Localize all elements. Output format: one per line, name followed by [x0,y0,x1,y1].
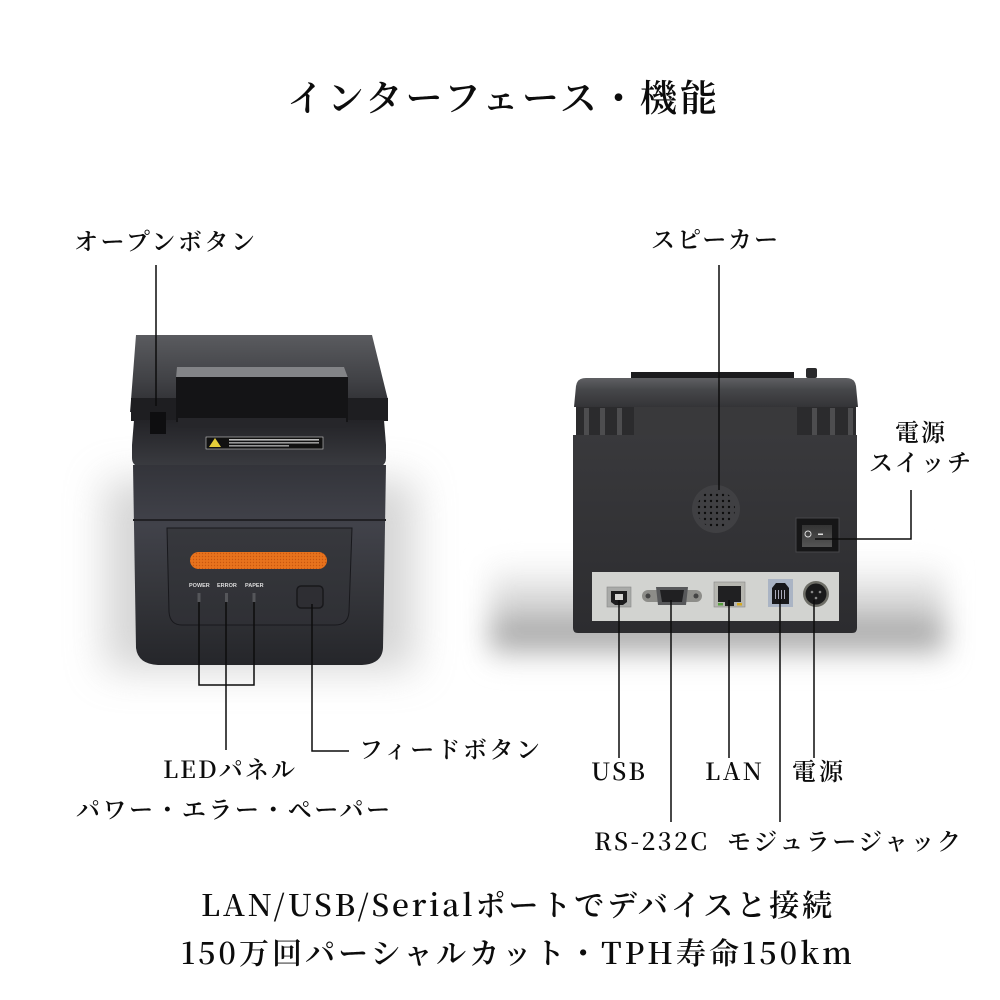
label: open button: オープンボタン [74,222,255,257]
rear body [573,435,857,633]
printer main body [133,465,386,665]
LAN port [714,582,745,607]
warning label [206,437,323,449]
printer rear view [490,368,945,660]
footer line 1: LAN/USB/Serialポートでデバイスと接続 [201,881,832,925]
cover lower band [131,398,388,421]
rear top plate [574,378,858,407]
title: インターフェース・機能 [287,68,717,122]
serial port [642,587,702,605]
printer front view [105,335,415,670]
leader lines [156,265,911,822]
label: LED panel: LEDパネル [163,750,295,785]
paper exit tray [176,367,348,428]
label: modular jack: モジュラージャック [727,822,961,857]
top power key [806,368,817,378]
USB port [607,587,631,607]
front panel [167,528,352,625]
rear printer shadow [490,560,945,660]
label: LED types: パワー・エラー・ペーパー [76,790,390,825]
label: LAN: LAN [705,752,762,787]
LED lights [198,593,256,602]
top bar [631,372,794,378]
footer line 2: 150万回パーシャルカット・TPH寿命150km [181,929,852,973]
LED names: PAPER [245,583,264,589]
power socket [803,581,829,607]
label: feed button: フィードボタン [359,730,540,765]
label: power switch line 1: 電源 [895,413,947,448]
label: RS-232C: RS-232C [594,822,707,857]
label: USB: USB [591,752,645,787]
orange indicator window [190,552,327,569]
rocker switch [796,518,839,552]
modular jack [768,579,793,607]
rear vents [576,405,856,436]
printer upper body [132,420,386,467]
speaker grille [692,485,740,533]
label: speaker: スピーカー [651,220,778,255]
LED names [189,583,264,589]
port panel [592,572,839,621]
open button [150,412,166,434]
label: power switch line 2: スイッチ [869,443,971,478]
raised paper cover [130,335,388,412]
LED names: POWER [189,583,210,589]
feed button [297,586,323,608]
label: power: 電源 [792,752,845,787]
front printer shadow [105,480,415,670]
LED names: ERROR [217,583,237,589]
